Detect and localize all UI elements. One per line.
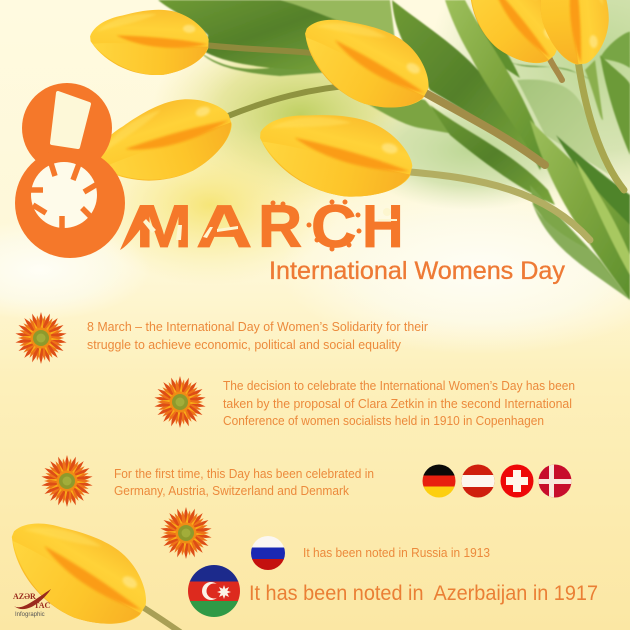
icon: flower 2 [154,376,206,428]
tulip stems [138,45,624,630]
text block: solidarity: struggle to achieve economic, political and social equality [87,337,401,352]
heading: MARCH: C [311,193,356,261]
big numeral 8 [15,83,125,258]
flag: Russia [250,536,286,571]
text: Azerbaijan 1917: It has been noted in Azerbaijan in 1917 [249,582,598,605]
icon: flower 3 [41,455,93,507]
tulip: top right front [534,0,614,68]
text block: first celebrated: For the first time, this Day has been celebrated in [114,466,374,481]
tulip: top right rear [448,0,575,81]
icon: flower 1 [15,312,67,364]
heading: International Womens Day: International Womens Day [269,257,565,285]
flag: Switzerland [500,464,534,498]
tulip bouquet leaves [158,0,630,300]
clock face in the lower loop [29,160,99,232]
text block: first celebrated: Germany, Austria, Switzerland and Denmark [114,483,349,498]
logo: AZERTAC Infographic: Infographic [15,612,45,618]
flag: Azerbaijan [187,565,241,618]
tulip: top left [88,6,210,78]
exclamation slot in the upper loop [52,93,89,147]
tulip: left middle [86,86,242,199]
tulip: centre [250,96,420,211]
text block: Clara Zetkin proposal: Conference of women socialists held in 1910 in Copenhagen [223,413,544,428]
heading: MARCH: H [362,194,404,260]
text: Russia 1913: It has been noted in Russia in 1913 [303,545,490,560]
text block: solidarity [87,319,429,352]
text block: Clara Zetkin proposal: The decision to celebrate the International Women’s Day has been [223,378,575,393]
text block: Clara Zetkin proposal [223,378,575,428]
flag: Denmark [538,464,572,499]
tulip: bottom left [0,499,163,630]
icon: flower 4 [160,507,212,559]
heading: MARCH: A [196,193,252,260]
text block: first celebrated [114,466,374,498]
text block: Clara Zetkin proposal: taken by the proposal of Clara Zetkin in the second International [223,396,572,411]
flag: Germany [422,464,456,498]
tulip: upper centre [288,0,443,128]
text block: solidarity: 8 March – the International Day of Women’s Solidarity for their [87,319,429,334]
logo: AZERTAC Infographic: AZƏR [13,592,36,601]
logo: AZERTAC Infographic [13,589,51,618]
heading: MARCH [120,193,404,261]
flag: Austria [461,464,495,499]
heading: MARCH: M [136,193,192,260]
logo: AZERTAC Infographic: TAC [34,601,51,610]
heading: MARCH: R [258,193,302,260]
